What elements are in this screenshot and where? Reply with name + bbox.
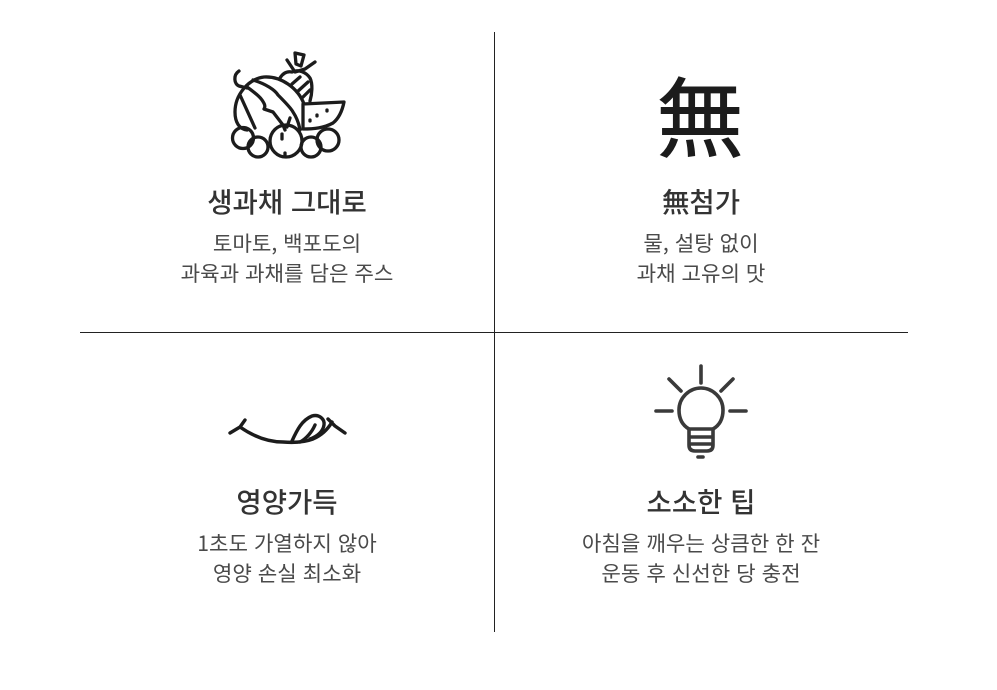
- heading: no additives: 無첨가: [662, 180, 740, 220]
- icon: no-additive character: 無: [656, 50, 744, 176]
- text: nutrition description: 영양 손실 최소화: [213, 557, 361, 588]
- text: tips description: 아침을 깨우는 상큼한 한 잔: [582, 527, 820, 558]
- text: fresh description: 과육과 과채를 담은 주스: [181, 257, 393, 288]
- text: no additives description: [637, 227, 765, 288]
- heading: small tips: 소소한 팁: [647, 480, 755, 520]
- text: fresh description: 토마토, 백포도의: [213, 227, 361, 258]
- heading: full nutrition: 영양가득: [236, 480, 338, 520]
- text: no additives description: 물, 설탕 없이: [643, 227, 759, 258]
- text: no additives description: 과채 고유의 맛: [637, 257, 765, 288]
- text: tips description: [582, 527, 820, 588]
- text: fresh description: [181, 227, 393, 288]
- text: nutrition description: 1초도 가열하지 않아: [197, 527, 377, 558]
- text: tips description: 운동 후 신선한 당 충전: [601, 557, 801, 588]
- heading: fresh fruit and vegetables: 생과채 그대로: [207, 180, 367, 220]
- text: nutrition description: [197, 527, 377, 588]
